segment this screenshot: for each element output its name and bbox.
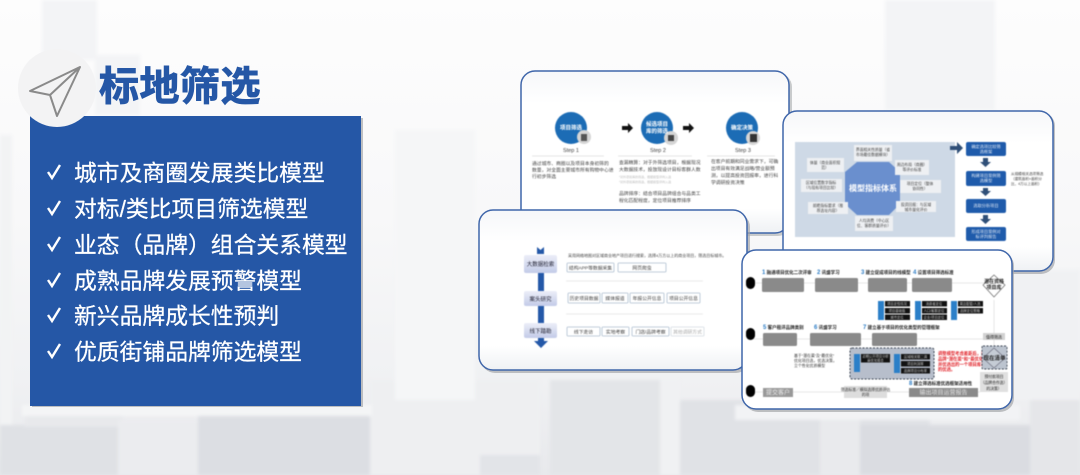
- red note: 调整模型考虑差距后，选择: [938, 350, 990, 357]
- row 2: [763, 324, 1005, 346]
- tag groups: 消费者定位: [926, 301, 943, 306]
- step 3: [707, 112, 778, 186]
- step 1: 项目筛选: [560, 124, 582, 132]
- indicator diagram: （与现有项目比较）: [804, 185, 838, 190]
- arrow: [950, 142, 963, 154]
- list item 5: 新兴品牌成长性预判: [74, 303, 279, 329]
- indicator diagram: 周边布局（商圈）: [897, 163, 927, 167]
- indicator diagram: 体量（商业面积规: [810, 161, 840, 165]
- row 3: 输出项目运营报告: [919, 388, 968, 396]
- title: 标地筛选: [99, 65, 261, 109]
- step 3: Step 3: [735, 148, 751, 154]
- note: 比，4万以上面积）: [1011, 181, 1042, 186]
- vertical flow: 线下踏勘: [529, 327, 552, 335]
- arrow: [622, 123, 633, 133]
- step 3: 在客户前期和同业需求下，可确: [711, 158, 778, 165]
- dashed model area: [850, 348, 934, 379]
- step 2: 库的筛选: [646, 127, 668, 135]
- list item 1: 城市及商圈发展类比模型: [74, 160, 325, 186]
- step 2: [618, 112, 701, 204]
- vertical flow: [524, 247, 557, 348]
- arrow: [683, 123, 694, 133]
- tag groups: 项目基础值: [889, 308, 906, 313]
- row 3: 筛选标准／模拟选择优质评估: [841, 387, 890, 392]
- card 3: research funnel: 结构APP等数据采集: [569, 264, 612, 272]
- card 3: research funnel: 媒体报道: [605, 295, 625, 302]
- card 3: research funnel: 年报公开信息: [633, 295, 662, 302]
- row 3: 8 建立筛选标准优选框架适用性: [909, 380, 973, 387]
- card 3: research funnel: 其他调研方式: [673, 328, 702, 336]
- indicator diagram: 模型指标体系: [849, 183, 897, 193]
- grey note: [980, 372, 1008, 392]
- flow chart: 构建项目案例筛: [971, 173, 1001, 178]
- icon: paper plane: [18, 49, 96, 127]
- step 2: 候选项目: [646, 120, 668, 128]
- card 3: research funnel: 线下走访: [574, 328, 593, 336]
- flow chart: 确定选项比较筛: [971, 144, 1001, 149]
- step 1: 通过城市、商圈以及项目本身初筛的: [532, 160, 609, 167]
- vertical flow: 案头研究: [529, 295, 552, 303]
- step 3: 测，以提高投资回报率，进行科: [711, 172, 778, 179]
- row 1: 项目库: [986, 284, 1002, 291]
- grey note: （品牌合作选）: [981, 380, 1007, 385]
- tag groups: 人口/客群定位: [924, 308, 945, 313]
- intro text: 采用网络地图对区域商业地产项目进行搜索，选择4万方以上的商业项目，筛选目标城市。: [568, 252, 726, 258]
- card 3: research funnel: 门店/品牌考察: [635, 328, 666, 336]
- dashed model area: 项目利润率: [907, 361, 924, 366]
- step 3: 出项目有效满足战略/营业额预: [711, 165, 775, 172]
- explanatory text: 立个性化优质模型: [794, 363, 825, 368]
- row 1: 2 讯盛学习: [817, 269, 840, 276]
- grey note: 预付款项目: [985, 374, 1004, 379]
- explanatory text: 基于“潜在渠”及“最优化”: [794, 353, 835, 358]
- vertical flow: 大数据检索: [527, 260, 555, 268]
- dashed model area: 近期公开项目分析: [862, 354, 889, 358]
- row 1: 1 融通项目优化二次评审: [762, 269, 812, 276]
- row 3: 提交客户: [766, 388, 790, 396]
- explanatory text: 优化项目选，优选决策，: [794, 358, 837, 363]
- dashed model area: 品牌项目分布率: [904, 368, 928, 373]
- step 3: 学调研投资决策: [711, 179, 745, 186]
- card 1: three steps: [521, 71, 792, 236]
- dashed model area: 区域相关联二调: [904, 354, 928, 359]
- tag groups: 品牌定位策略: [960, 308, 981, 313]
- indicator diagram: 城市量化评价: [905, 207, 928, 212]
- row 1: 4 设置项目筛选标准: [913, 269, 954, 276]
- diamond: [983, 275, 1005, 297]
- indicator diagram: 项目定位（整体: [907, 182, 933, 186]
- indicator diagram: 人均消费（中心区: [859, 219, 889, 223]
- indicator diagram: 区域位置数字指标: [806, 181, 836, 185]
- card 2: model indicator system: [783, 111, 1055, 274]
- flow chart: 选模型: [980, 177, 992, 184]
- red note: 的优选。: [938, 366, 955, 373]
- row 1: 潜在资格: [984, 278, 1004, 285]
- indicator diagram: 市场最佳数据模块）: [856, 152, 890, 157]
- row 2: 6 讯盛学习: [814, 324, 837, 331]
- row 1: 3 建立促成项目的线模型: [861, 269, 911, 276]
- step 1: [532, 112, 614, 180]
- row 2: 7 建立基于项目的优化类型的管理框架: [863, 324, 940, 331]
- step 1: 行初步筛选: [532, 173, 556, 180]
- grey note: 的决策）: [986, 386, 1002, 391]
- card 4: process chart: [742, 250, 1014, 412]
- list item 2: 对标/类比项目筛选模型: [74, 196, 308, 222]
- step 2: 品牌排序：结合项目品牌组合与品类工: [619, 190, 701, 197]
- step 2: 程化匹配程度，定位项目推荐排序: [619, 197, 691, 204]
- row 3: 的项: [862, 392, 869, 397]
- indicator diagram: 界面相关性质量（省: [856, 148, 890, 152]
- row lines: [754, 283, 994, 392]
- step 2: 大数据技术，投放现设计目标客群人数: [619, 166, 701, 173]
- indicator diagram: 位、客群质量评价）: [857, 223, 891, 228]
- step 2: *对外项目库的筛选，根据模型评判入选: [619, 174, 671, 179]
- row 1: [762, 269, 1005, 297]
- tag groups: 城市定位: [890, 314, 904, 320]
- step 1: Step 1: [563, 148, 579, 154]
- card 3: research funnel: 网页爬虫: [632, 264, 652, 272]
- step 3: 确定决策: [731, 124, 753, 132]
- list item 6: 优质街铺品牌筛选模型: [74, 339, 302, 365]
- flow chart: [966, 142, 1006, 241]
- dashed model area: 最优化组合: [867, 358, 884, 362]
- row 2: 5 客户租评品牌类别: [763, 324, 804, 331]
- row badges: [746, 277, 755, 397]
- flow chart: 选框架: [980, 148, 992, 155]
- card 3: research funnel: 项目公开信息: [669, 295, 698, 302]
- indicator diagram: 荐选址内容）: [817, 208, 839, 213]
- tag groups: 项目定性情况: [887, 301, 908, 306]
- card 3: research funnel: [479, 210, 750, 373]
- row 2: 值得筛选: [986, 334, 1002, 340]
- step 2: Step 2: [650, 148, 666, 154]
- step 1: 数量，对全面主要城市所有购物中心进: [532, 166, 614, 174]
- indicator diagram: 范）: [821, 165, 829, 170]
- red note: 并优选出的一个项目库存: [938, 361, 986, 368]
- note: 从规模相关选项筛选: [1011, 171, 1044, 176]
- tag groups: 企业/项目定位: [924, 314, 945, 320]
- option boxes: [567, 263, 704, 336]
- tag groups: [878, 301, 983, 320]
- step 2: *对外项目库的筛选，根据模型评判入选: [619, 179, 671, 184]
- indicator diagram: 前瞻指标要求（推: [813, 204, 843, 208]
- note: （建筑面积×面积分: [1011, 176, 1042, 181]
- indicator diagram: [795, 142, 955, 237]
- card 3: research funnel: 实地考察: [606, 328, 625, 336]
- list item 3: 业态（品牌）组合关系模型: [74, 232, 348, 258]
- tag groups: 周边配套/人流: [960, 301, 981, 306]
- list item 4: 成熟品牌发展预警模型: [74, 268, 302, 294]
- flow chart: 标评判报告: [976, 233, 996, 240]
- indicator diagram: 协同性）: [912, 186, 928, 191]
- flow chart: 选取分析项目: [973, 202, 999, 209]
- dashed box: [982, 346, 1007, 369]
- dashed box: 现在清单: [983, 354, 1006, 362]
- blue panel: [30, 116, 363, 407]
- indicator diagram: 投资回报：与区域: [901, 203, 931, 207]
- flow chart: 形成项目案例对: [971, 229, 1001, 234]
- card 3: research funnel: 历史项目数据: [570, 295, 599, 302]
- step 2: 查漏精算：对于外筛选项目，根据现况: [619, 159, 701, 166]
- red note: 品牌“潜在渠”和“最优化”: [938, 356, 985, 362]
- row 3: [763, 380, 978, 398]
- indicator diagram: 等评价标准: [903, 167, 922, 172]
